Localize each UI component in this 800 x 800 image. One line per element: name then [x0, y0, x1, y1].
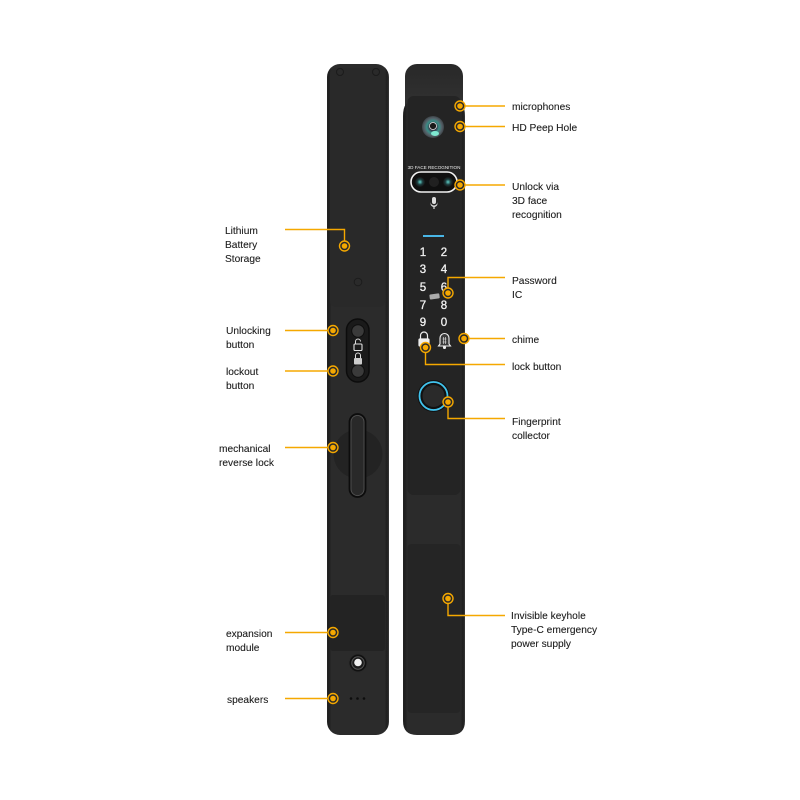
speaker holes: [350, 697, 365, 700]
keypad: 3: [420, 264, 426, 276]
callout: expansion module: [226, 628, 338, 654]
top screw left: [336, 68, 344, 76]
callout: invisible keyhole and Type-C power: [443, 594, 598, 650]
expansion module cover: [330, 595, 385, 651]
callout: lithium battery storage: [225, 226, 350, 265]
callout: unlocking button: button: [226, 340, 254, 351]
callout: lithium battery storage: Battery: [225, 240, 258, 251]
top screw right: [372, 68, 380, 76]
battery storage cover: [330, 68, 385, 307]
cover screw: [354, 278, 362, 286]
panel: front of lock: [403, 64, 465, 735]
keypad: 0: [441, 317, 447, 329]
front upper cap: [405, 64, 463, 154]
callout: chime: chime: [512, 335, 540, 346]
reverse lock handle: [334, 414, 382, 497]
button housing: [346, 319, 369, 382]
callout: microphones: microphones: [512, 102, 570, 113]
callout: lock button: [420, 342, 561, 373]
callout: lockout button: [226, 366, 338, 392]
round cylinder: [349, 654, 367, 672]
callout: unlocking button: [226, 326, 338, 351]
keypad: 8: [441, 300, 447, 312]
3D face recognition label: 3D FACE RECOGNITION: [408, 165, 460, 170]
callout: mechanical reverse lock: mechanical: [219, 444, 271, 455]
callout: fingerprint collector: Fingerprint: [512, 417, 561, 428]
callout: expansion module: module: [226, 643, 260, 654]
fingerprint sensor: [418, 380, 450, 412]
callout: invisible keyhole and Type-C power: Invisible keyhole: [511, 611, 586, 622]
callout: mechanical reverse lock: reverse lock: [219, 458, 275, 469]
keypad: 6: [441, 282, 447, 294]
icon: lock: [419, 332, 429, 346]
callout: invisible keyhole and Type-C power: power supply: [511, 639, 572, 650]
callout: fingerprint collector: collector: [512, 431, 551, 442]
callout: lithium battery storage: Storage: [225, 254, 261, 265]
callout: lithium battery storage: Lithium: [225, 226, 258, 237]
front body: [403, 102, 465, 735]
callout: password IC: IC: [512, 290, 522, 301]
callout: unlock via 3D face recognition: recognition: [512, 210, 562, 221]
icon: microphone: [430, 197, 438, 209]
callout: invisible keyhole and Type-C power: Type-C emergency: [511, 625, 598, 636]
keypad: 1: [420, 247, 426, 259]
callout: fingerprint collector: [443, 397, 561, 442]
callout: chime: [459, 334, 540, 346]
keypad: 4: [441, 264, 448, 276]
back body: [327, 64, 389, 735]
callout: unlock via 3D face recognition: Unlock via: [512, 182, 559, 193]
face camera module: [411, 172, 457, 192]
callout: microphones: [455, 101, 570, 113]
lower keyhole cover: [408, 544, 460, 713]
callout: unlocking button: Unlocking: [226, 326, 271, 337]
callout: lockout button: button: [226, 381, 254, 392]
keypad: 2: [441, 247, 447, 259]
peep hole lens: [422, 116, 444, 138]
callout: HD peep hole: [455, 122, 577, 134]
callout: expansion module: expansion: [226, 629, 272, 640]
callout: HD peep hole: HD Peep Hole: [512, 123, 577, 134]
keypad: 9: [420, 317, 426, 329]
callout: speakers: speakers: [227, 695, 268, 706]
status light bar: [423, 235, 444, 237]
panel: back of lock: [327, 64, 389, 735]
callout: unlock via 3D face recognition: 3D face: [512, 196, 547, 207]
icon: bell: [438, 334, 450, 348]
callout: lock button: lock button: [512, 362, 561, 373]
front glass panel: [408, 96, 460, 495]
callout: mechanical reverse lock: [219, 442, 338, 469]
keypad: 5: [420, 282, 426, 294]
keypad: [420, 247, 448, 329]
callout: speakers: [227, 694, 338, 706]
callout: password IC: [443, 276, 557, 301]
callout: unlock via 3D face recognition: [455, 180, 562, 221]
keypad: 7: [420, 300, 426, 312]
callout: password IC: Password: [512, 276, 557, 287]
callout: lockout button: lockout: [226, 367, 258, 378]
